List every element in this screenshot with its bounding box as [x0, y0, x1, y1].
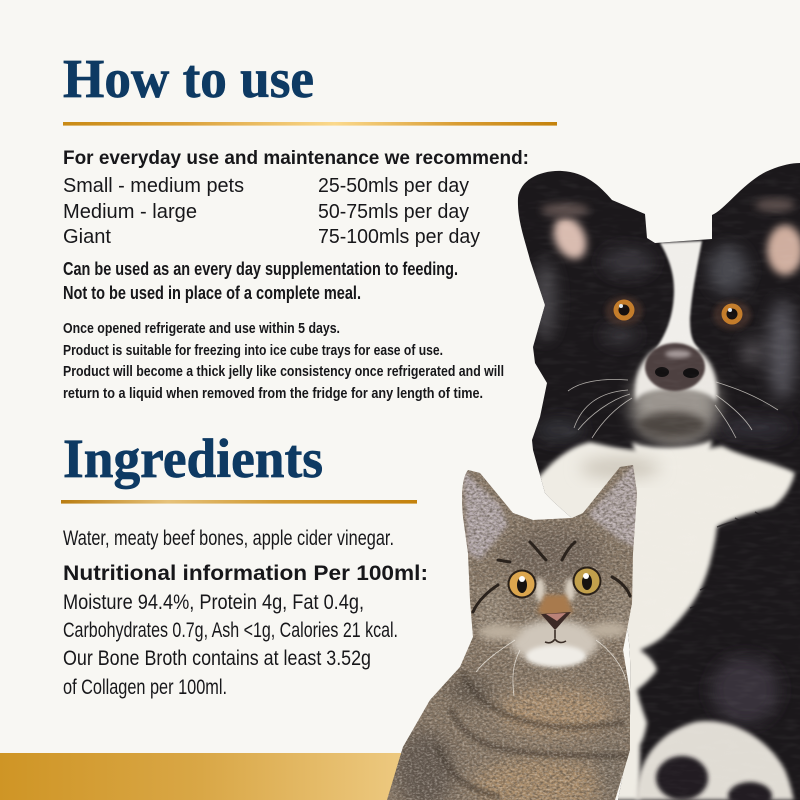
dosage table: Small - medium pets [63, 175, 244, 197]
cat left eye [508, 570, 536, 598]
cat fur texture dark [380, 460, 640, 800]
nutritional information text: Moisture 94.4%, Protein 4g, Fat 0.4g, [63, 591, 364, 614]
cat fur texture light [380, 460, 640, 800]
dosage table [63, 175, 480, 248]
heading: Ingredients: Ingredients [63, 428, 323, 489]
dog right eye [713, 300, 751, 330]
nutritional information text: Carbohydrates 0.7g, Ash <1g, Calories 21 kcal. [63, 619, 398, 642]
photo: tabby cat [380, 460, 640, 800]
cat muzzle [478, 620, 628, 667]
dog muzzle [631, 342, 719, 470]
cat forehead and cheeks [476, 529, 630, 636]
nutritional information text [63, 591, 398, 699]
nutritional information heading: Nutritional information Per 100ml: [63, 562, 428, 585]
storage instructions: Product is suitable for freezing into ice cube trays for ease of use. [63, 343, 443, 359]
cat brow highlights [535, 578, 575, 602]
supplementation note: Not to be used in place of a complete meal. [63, 283, 361, 303]
bottom gold band [0, 753, 402, 800]
dog white blaze [655, 241, 702, 350]
dog paw dark toes [656, 756, 772, 800]
dog nose [645, 343, 705, 391]
cat mouth [545, 630, 566, 643]
nutritional information text: Our Bone Broth contains at least 3.52g [63, 647, 371, 670]
dosage table: Medium - large [63, 201, 197, 223]
cat right eye [572, 566, 602, 596]
photo: border collie dog [510, 160, 800, 800]
dosage table: 75-100mls per day [318, 226, 480, 248]
cat forehead stripes [473, 542, 630, 612]
cat nose [537, 595, 573, 630]
dog chest shadow [580, 457, 660, 479]
dog grey fur sheen [534, 246, 796, 724]
dog whiskers [568, 379, 778, 438]
dog white paw [636, 721, 794, 800]
cat neck stripes [437, 672, 630, 797]
gold rule under How to use [63, 122, 557, 126]
cat neck and chest fur [395, 676, 626, 800]
supplementation note [63, 259, 458, 303]
storage instructions [63, 321, 504, 402]
dosage table: 50-75mls per day [318, 201, 469, 223]
dog left inner ear [541, 203, 593, 264]
cat left ear [463, 470, 508, 560]
heading: How to use: How to use [63, 48, 314, 109]
ingredients list: Water, meaty beef bones, apple cider vinegar. [63, 527, 394, 550]
dosage table: 25-50mls per day [318, 175, 469, 197]
supplementation note: Can be used as an every day supplementation to feeding. [63, 259, 458, 279]
cat whiskers [476, 640, 626, 696]
dog left eye [605, 296, 643, 326]
storage instructions: Product will become a thick jelly like consistency once refrigerated and will [63, 364, 504, 380]
cat right ear [588, 465, 637, 548]
dog fur texture [544, 181, 796, 738]
storage instructions: Once opened refrigerate and use within 5 days. [63, 321, 340, 337]
storage instructions: return to a liquid when removed from the fridge for any length of time. [63, 386, 483, 402]
dosage table: Giant [63, 226, 111, 248]
dog chest ruffle hair [690, 512, 760, 608]
dog right inner ear [755, 198, 800, 275]
recommendation heading: For everyday use and maintenance we recommend: [63, 148, 529, 169]
gold rule under Ingredients [61, 500, 417, 504]
nutritional information text: of Collagen per 100ml. [63, 676, 227, 699]
dog white chest [528, 442, 795, 800]
